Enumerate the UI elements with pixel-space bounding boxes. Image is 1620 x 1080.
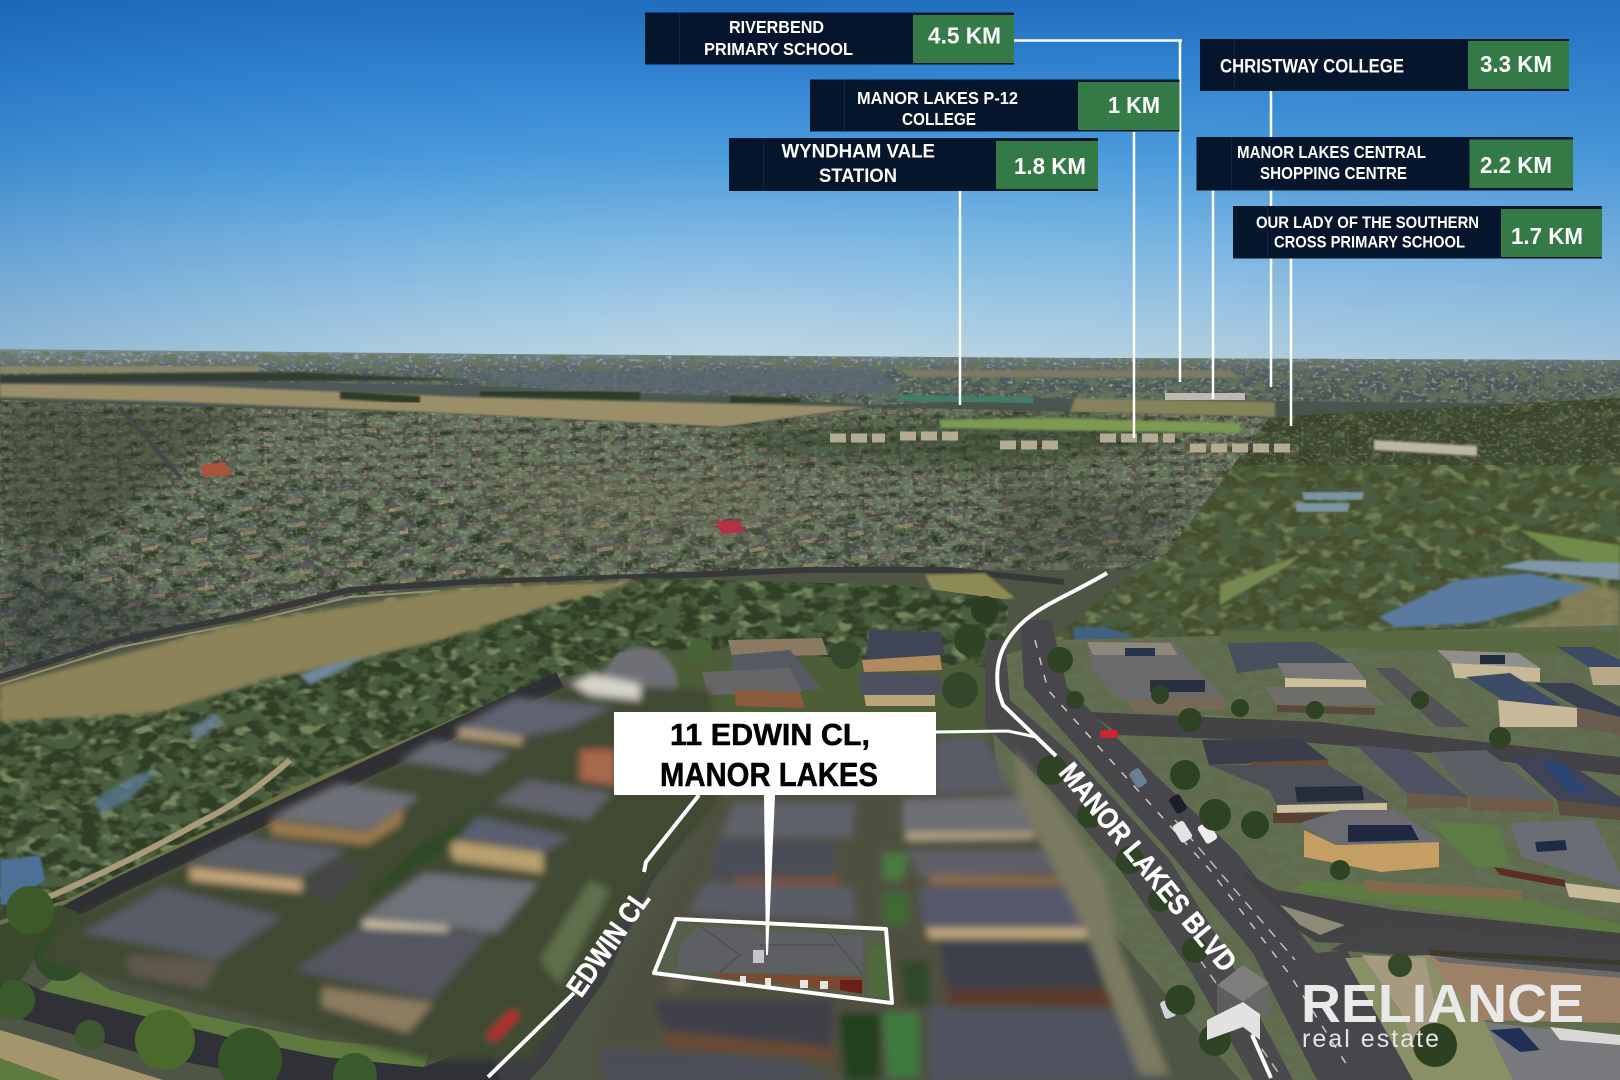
Edwin Cl roads [0, 795, 717, 1080]
suburb housing [0, 400, 1270, 674]
lawn tracts [1205, 630, 1620, 935]
distance tag: Wyndham Vale Station: WYNDHAM VALE [782, 140, 935, 162]
distance tag: Manor Lakes P-12 College [810, 80, 1180, 132]
distance tag: Riverbend Primary School [645, 12, 1014, 64]
distance tag: Riverbend Primary School: RIVERBEND [729, 17, 824, 37]
verge trees along the boulevard [1037, 647, 1511, 1056]
wetland trees [0, 578, 1010, 920]
street label: Manor Lakes Blvd: MANOR LAKES BLVD [1052, 757, 1242, 978]
mid sharp houses above the label [560, 596, 1000, 740]
cars on the boulevard [1100, 730, 1218, 1020]
distance tag: Manor Lakes Central Shopping Centre: 2.2 KM [1480, 152, 1552, 178]
distance tag: Our Lady of the Southern Cross Primary School: OUR LADY OF THE SOUTHERN [1256, 214, 1479, 232]
logo: Reliance Real Estate: real estate [1302, 1025, 1439, 1053]
street label: Edwin Cl: EDWIN CL [561, 884, 657, 1003]
distance tag: Christway College [1200, 39, 1569, 91]
sky background [0, 0, 1620, 365]
blurred neighbouring houses [40, 673, 1170, 1080]
distance tag: Wyndham Vale Station [729, 138, 1098, 191]
aerial landscape [0, 349, 1620, 1080]
road line: Manor Lakes Blvd upper [997, 573, 1107, 756]
address label: MANOR LAKES [660, 756, 878, 793]
sports ovals and college buildings [830, 393, 1477, 456]
road line: side street to label [936, 731, 1036, 737]
grass field [925, 573, 1015, 600]
distance tag: Manor Lakes Central Shopping Centre [1196, 137, 1573, 190]
distance tag: Manor Lakes Central Shopping Centre: MANOR LAKES CENTRAL [1237, 142, 1426, 162]
distance tag: Riverbend Primary School: 4.5 KM [928, 22, 1001, 48]
foreground street trees [0, 886, 377, 1080]
subject property outline [654, 919, 892, 1003]
distance tag: Christway College: CHRISTWAY COLLEGE [1220, 57, 1404, 78]
right wetland [1055, 398, 1620, 641]
distance tag: Christway College: 3.3 KM [1480, 51, 1552, 77]
tan paddocks [0, 384, 868, 427]
distance tag: Manor Lakes Central Shopping Centre: SHOPPING CENTRE [1260, 163, 1407, 183]
ground base [0, 395, 1620, 1080]
distance tag: Our Lady of the Southern Cross Primary School [1233, 206, 1602, 258]
dry grass reserve [0, 582, 640, 722]
distance tag: Manor Lakes P-12 College: COLLEGE [902, 109, 976, 129]
subject house roof [656, 922, 892, 1000]
road line: Manor Lakes Blvd lower [1252, 1035, 1271, 1078]
Edwin road with footpath [0, 680, 560, 930]
address label: 11 EDWIN CL, [670, 717, 870, 752]
road line: Edwin Cl upper [644, 795, 699, 872]
distance tag: Riverbend Primary School: PRIMARY SCHOOL [704, 39, 853, 59]
distance tag: Our Lady of the Southern Cross Primary School: CROSS PRIMARY SCHOOL [1274, 234, 1465, 252]
lakes [1074, 492, 1620, 642]
corner pavement and lawn [1345, 953, 1513, 1080]
distance tag: Wyndham Vale Station: STATION [819, 165, 897, 187]
distance tag: Our Lady of the Southern Cross Primary School: 1.7 KM [1511, 223, 1583, 249]
suburb street and feature roofs [0, 407, 1064, 684]
distant horizon towns [0, 349, 1620, 408]
sharp houses, right [1087, 642, 1620, 1080]
right side estate ground [985, 625, 1620, 1080]
distance tag: Manor Lakes P-12 College: MANOR LAKES P-12 [857, 88, 1018, 108]
logo: Reliance Real Estate: RELIANCE [1301, 974, 1584, 1034]
icon: logo house mark [1207, 965, 1269, 1040]
road line: Edwin Cl lower [488, 993, 574, 1077]
distance tag: Wyndham Vale Station: 1.8 KM [1014, 153, 1086, 179]
distance tag: Manor Lakes P-12 College: 1 KM [1108, 92, 1160, 118]
logo: Reliance Real Estate [1207, 965, 1584, 1053]
address label [614, 712, 936, 795]
pointer from address label to property [764, 795, 775, 955]
Manor Lakes Blvd carriageways [985, 620, 1620, 1080]
connector lines [960, 40, 1291, 438]
